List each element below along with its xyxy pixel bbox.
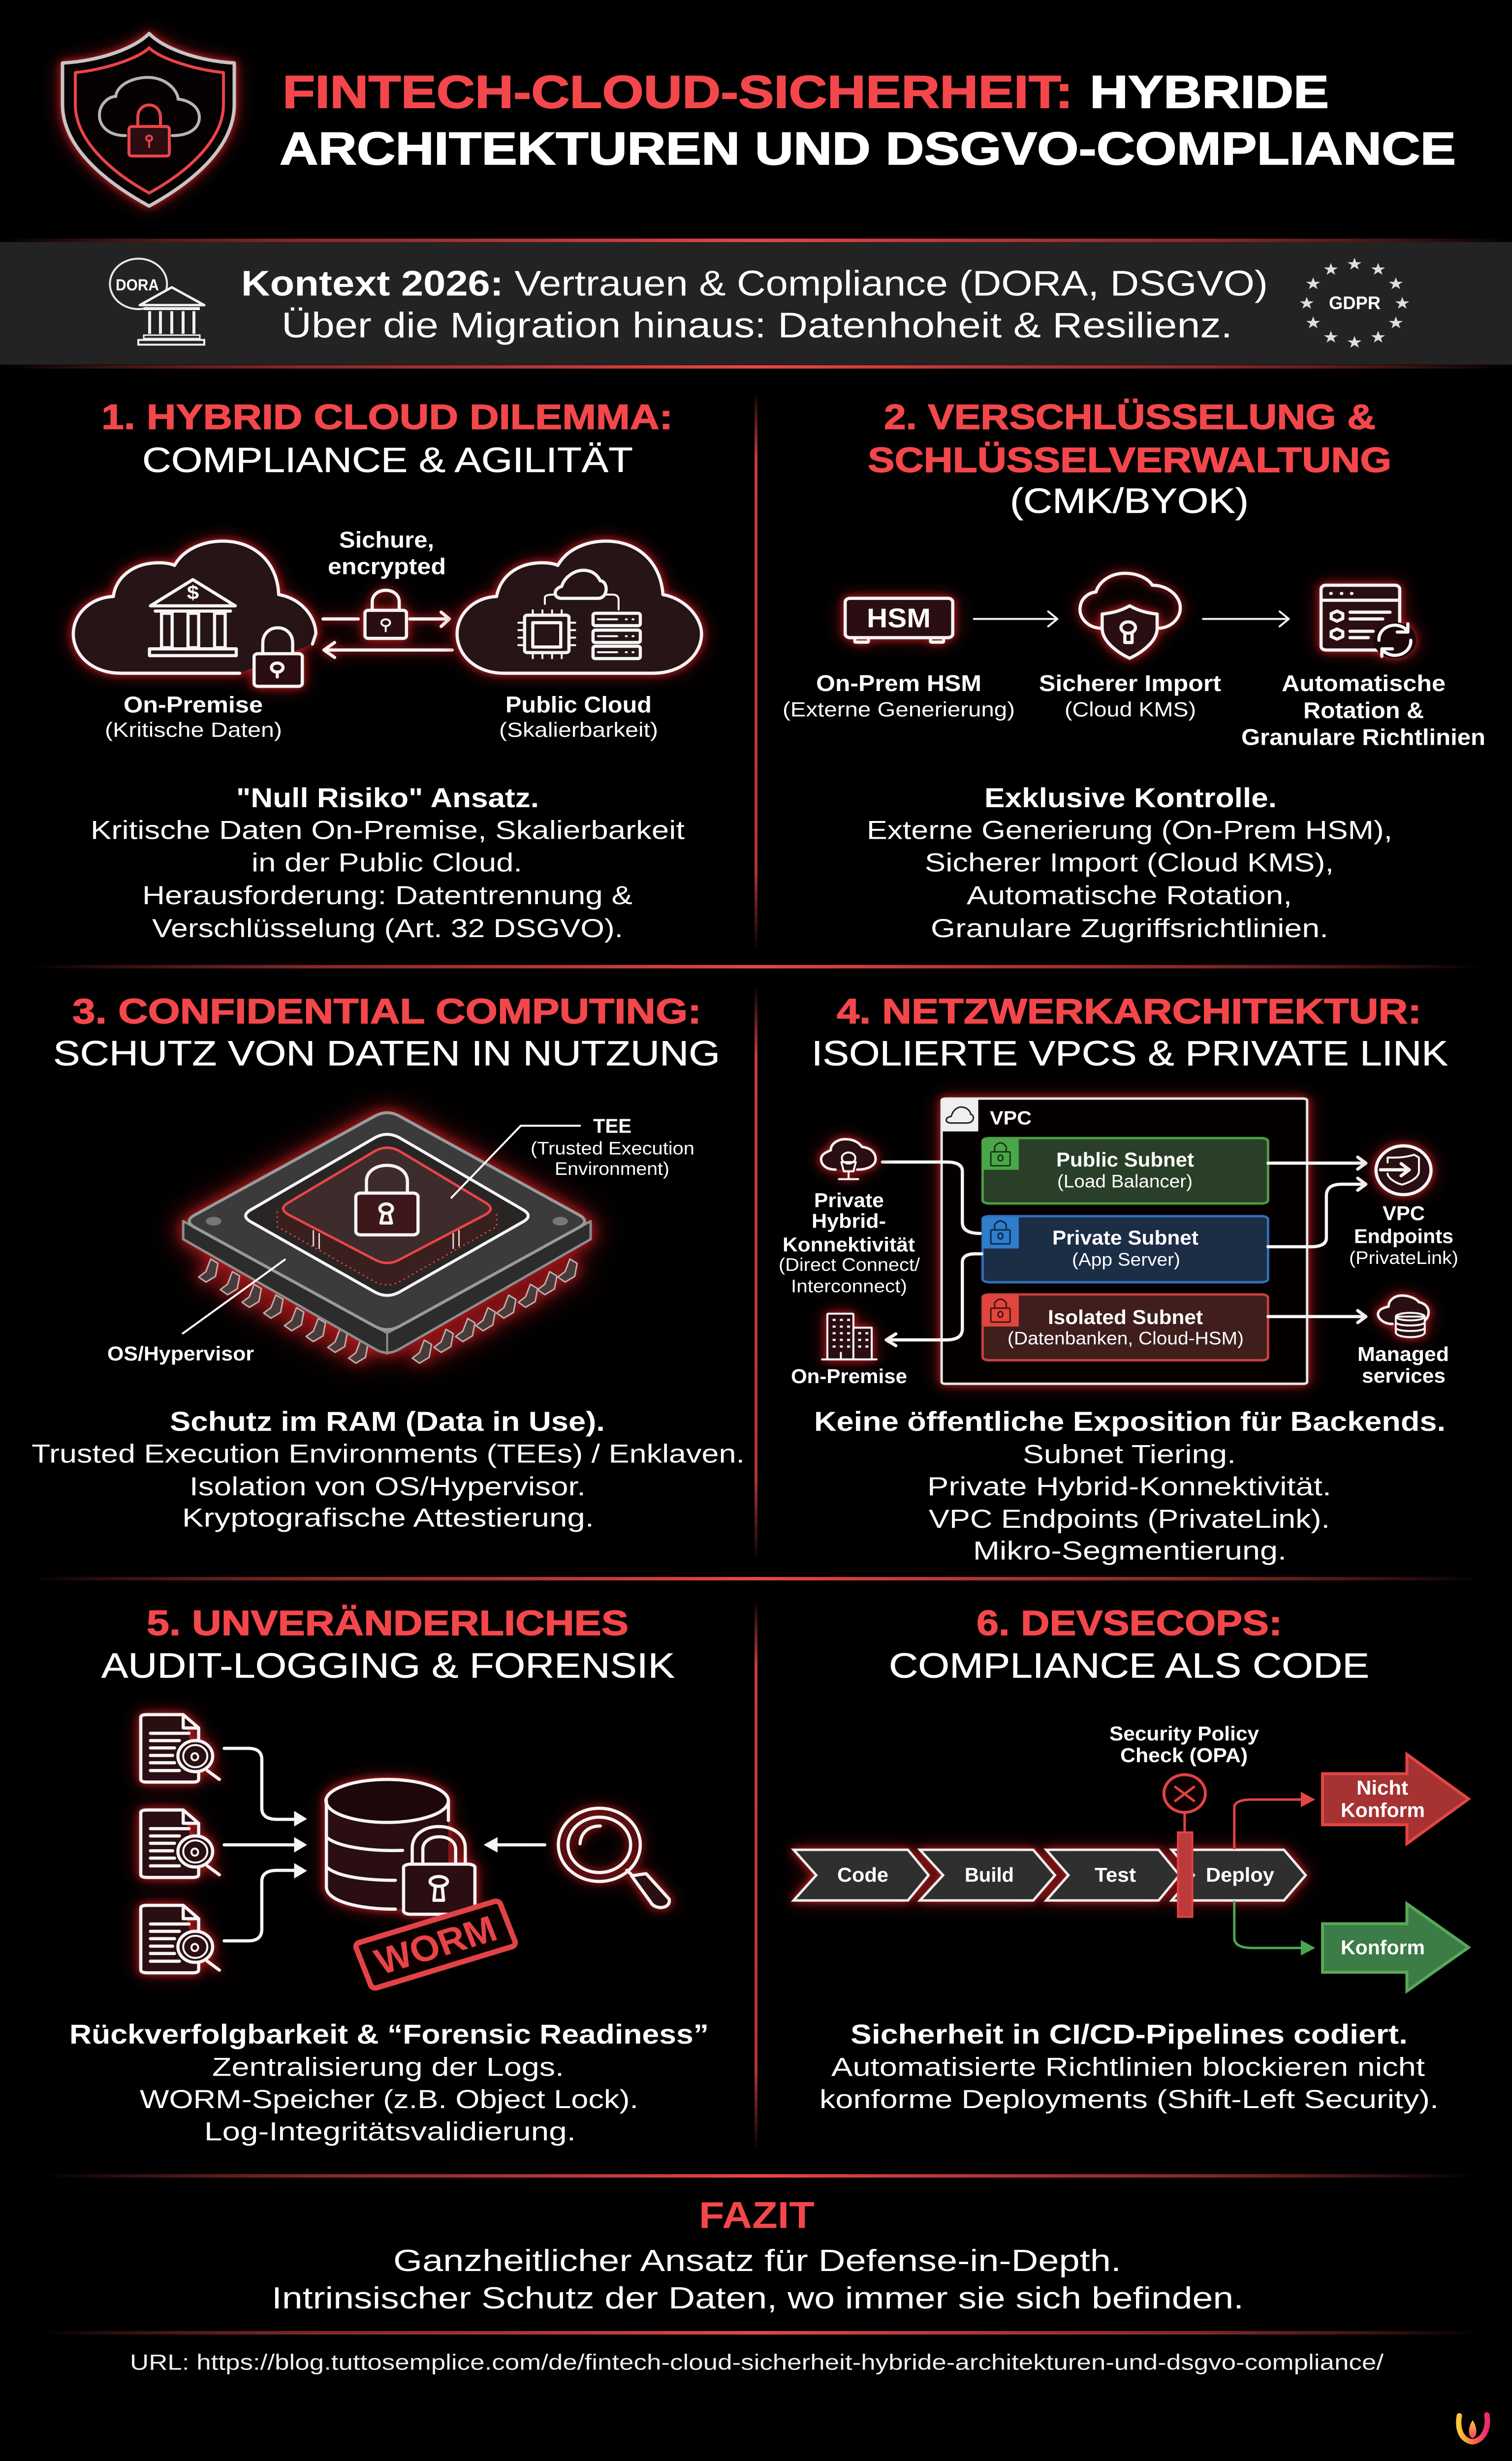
label: on-premise: On-Premise: [791, 1365, 907, 1388]
isolated subnet: Isolated Subnet: [1048, 1306, 1203, 1328]
heading 5: 5. UNVERÄNDERLICHES: [147, 1604, 629, 1643]
text block 4: [814, 1406, 1446, 1565]
icon: on-premise cloud with bank and lock: [73, 541, 316, 686]
icon: HSM box: HSM: [867, 603, 931, 633]
panel: 4 network architecture: [779, 992, 1458, 1565]
heading 1: COMPLIANCE & AGILITÄT: [142, 441, 633, 480]
title: ARCHITEKTUREN UND DSGVO-COMPLIANCE: [280, 123, 1456, 174]
label: rotation and policies: Automatische: [1282, 670, 1446, 696]
label: private hybrid connectivity: Private: [814, 1190, 884, 1212]
text block 3: [32, 1406, 745, 1532]
text block 1: "Null Risiko" Ansatz.: [236, 782, 539, 813]
pipeline labels: Test: [1095, 1864, 1136, 1886]
banner text: Über die Migration hinaus: Datenhoheit & Resilienz.: [282, 306, 1232, 345]
branch: not compliant: [1234, 1754, 1469, 1849]
label: VPC: VPC: [990, 1107, 1032, 1129]
icons: log documents: [141, 1715, 220, 1973]
VPC frame: [942, 1099, 1307, 1384]
heading 3: [53, 992, 720, 1073]
diagram: chip with TEE: [107, 1113, 694, 1365]
icon: private hybrid cloud: [821, 1139, 876, 1179]
text block 5: WORM-Speicher (z.B. Object Lock).: [140, 2084, 638, 2114]
icon: brand logo: [1459, 2415, 1487, 2442]
label: VPC endpoints: (PrivateLink): [1349, 1248, 1458, 1268]
label: VPC endpoints: VPC: [1383, 1202, 1425, 1225]
text block 1: [91, 782, 685, 943]
heading 6: [889, 1604, 1369, 1686]
text block 5: Zentralisierung der Logs.: [212, 2052, 564, 2082]
text block 6: Sicherheit in CI/CD-Pipelines codiert.: [850, 2019, 1408, 2050]
heading 5: [101, 1604, 675, 1686]
text block 4: VPC Endpoints (PrivateLink).: [929, 1504, 1330, 1533]
header: logo shield and title: [63, 33, 1456, 206]
text block 5: Rückverfolgbarkeit & “Forensic Readiness”: [69, 2019, 709, 2050]
label: rotation and policies: Rotation &: [1303, 697, 1424, 723]
diagram: on-premise and public cloud: [73, 527, 701, 741]
pipeline steps: [793, 1850, 1306, 1900]
heading 1: [101, 398, 673, 480]
text block 4: Keine öffentliche Exposition für Backends.: [814, 1406, 1446, 1437]
panel: 5 immutable audit logging: [69, 1604, 709, 2146]
text block 2: [867, 782, 1392, 943]
label: secure import: Sicherer Import: [1039, 670, 1221, 696]
heading 4: 4. NETZWERKARCHITEKTUR:: [837, 992, 1421, 1031]
isolated subnet: (Datenbanken, Cloud-HSM): [1008, 1328, 1244, 1349]
title: FINTECH-CLOUD-SICHERHEIT:: [283, 66, 1073, 118]
label: managed services: [1357, 1343, 1449, 1387]
label: secure encrypted: [328, 527, 446, 579]
pipeline labels: Deploy: [1206, 1864, 1274, 1886]
text block 3: Schutz im RAM (Data in Use).: [170, 1406, 605, 1437]
heading 4: [812, 992, 1448, 1073]
pipeline labels: Code: [837, 1864, 888, 1886]
panel: 6 devsecops: [793, 1604, 1469, 2114]
label: private hybrid connectivity: Interconnect): [791, 1276, 907, 1296]
text block 2: Sicherer Import (Cloud KMS),: [925, 848, 1334, 877]
icon: DORA bank: DORA: [116, 276, 159, 294]
text block 6: konforme Deployments (Shift-Left Security).: [819, 2084, 1439, 2114]
text block 3: Isolation von OS/Hypervisor.: [189, 1472, 586, 1501]
public subnet: (Load Balancer): [1057, 1171, 1193, 1192]
heading 2: 2. VERSCHLÜSSELUNG &: [884, 398, 1376, 437]
title: HYBRIDE: [1090, 66, 1329, 118]
conclusion: Intrinsischer Schutz der Daten, wo immer sie sich befinden.: [272, 2281, 1244, 2315]
text block 1: Herausforderung: Datentrennung &: [142, 881, 632, 910]
diagram: WORM storage: [141, 1715, 669, 1989]
text block 2: Granulare Zugriffsrichtlinien.: [931, 914, 1328, 943]
heading 4: ISOLIERTE VPCS & PRIVATE LINK: [812, 1034, 1448, 1073]
heading 6: COMPLIANCE ALS CODE: [889, 1646, 1369, 1686]
icon: chip: [183, 1113, 591, 1363]
text block 6: [819, 2019, 1439, 2114]
label: on-prem hsm: On-Prem HSM: [816, 670, 981, 696]
label: OS/Hypervisor: [107, 1259, 285, 1365]
branch: not compliant: Konform: [1341, 1799, 1425, 1822]
label: secure import: (Cloud KMS): [1065, 698, 1196, 721]
icon: on-premise building: [822, 1314, 877, 1359]
diagram: VPC architecture: [779, 1099, 1458, 1388]
text block 4: Subnet Tiering.: [1023, 1440, 1236, 1469]
heading 2: (CMK/BYOK): [1010, 481, 1249, 521]
isolated subnet: [982, 1294, 1268, 1360]
branch: not compliant: Nicht: [1356, 1777, 1408, 1799]
text block 1: in der Public Cloud.: [252, 848, 522, 877]
label: rotation and policies: Granulare Richtlinien: [1241, 724, 1485, 750]
label: TEE: Environment): [555, 1159, 669, 1179]
arrows into storage: [224, 1748, 545, 1941]
label: private hybrid connectivity: (Direct Connect/: [779, 1255, 920, 1275]
panel: 3 confidential computing: [32, 992, 745, 1532]
icon: public cloud with chip and servers: [457, 541, 701, 673]
text block 5: Log-Integritätsvalidierung.: [204, 2117, 576, 2146]
icon: policy window with rotation: [1321, 585, 1416, 658]
icon: DORA bank: [110, 259, 204, 345]
text block 1: Kritische Daten On-Premise, Skalierbarkeit: [91, 816, 685, 845]
label: TEE: [451, 1115, 694, 1199]
label: on-premise: On-Premise: [124, 692, 263, 718]
panel: 1 hybrid cloud dilemma: [73, 398, 701, 943]
text block 2: Externe Generierung (On-Prem HSM),: [867, 816, 1392, 845]
label: managed services: services: [1362, 1365, 1446, 1387]
text block 4: Mikro-Segmentierung.: [973, 1536, 1287, 1565]
policy gate with x: [1164, 1775, 1205, 1917]
icon: GDPR stars: GDPR: [1329, 293, 1381, 313]
label: on-premise: (Kritische Daten): [105, 719, 282, 741]
label: security policy check: Security Policy: [1109, 1723, 1259, 1745]
icon: database with lock: [326, 1779, 475, 1914]
label: private hybrid connectivity: Hybrid-: [812, 1210, 886, 1232]
stamp: WORM: WORM: [369, 1908, 503, 1983]
label: managed services: Managed: [1357, 1343, 1449, 1365]
heading 1: 1. HYBRID CLOUD DILEMMA:: [101, 398, 673, 437]
label: TEE: TEE: [593, 1115, 631, 1137]
text block 3: Kryptografische Attestierung.: [182, 1503, 594, 1532]
label: secure encrypted: Sichure,: [339, 527, 434, 553]
private subnet: [982, 1216, 1268, 1282]
text block 3: Trusted Execution Environments (TEEs) / Enklaven.: [32, 1439, 745, 1468]
label: on-premise: [105, 692, 282, 741]
label: VPC endpoints: Endpoints: [1354, 1226, 1453, 1248]
text block 1: Verschlüsselung (Art. 32 DSGVO).: [152, 914, 623, 943]
icon: HSM box: [845, 599, 953, 642]
icon: managed services: [1378, 1295, 1429, 1337]
heading 2: [868, 398, 1391, 521]
heading 2: SCHLÜSSELVERWALTUNG: [868, 441, 1391, 480]
pipeline labels: [837, 1864, 1274, 1886]
label: security policy check: [1109, 1723, 1259, 1767]
title: [280, 66, 1456, 174]
label: TEE: (Trusted Execution: [531, 1138, 694, 1159]
label: security policy check: Check (OPA): [1120, 1744, 1248, 1767]
branch: compliant: [1234, 1901, 1469, 1991]
label: on-prem hsm: [783, 670, 1015, 721]
heading 6: 6. DEVSECOPS:: [976, 1604, 1282, 1643]
label: on-prem hsm: (Externe Generierung): [783, 698, 1015, 721]
text block 4: Private Hybrid-Konnektivität.: [927, 1472, 1331, 1501]
label: public cloud: [499, 692, 658, 741]
text block 2: Automatische Rotation,: [967, 881, 1292, 910]
icon: VPC endpoint: [1376, 1146, 1431, 1195]
label: secure encrypted: encrypted: [328, 553, 446, 579]
icon: GDPR stars: [1300, 258, 1409, 348]
icon: on-premise cloud with bank and lock: $: [187, 581, 199, 603]
diagram: key flow: [783, 573, 1485, 750]
panel: 2 encryption and key management: [783, 398, 1485, 943]
label: VPC endpoints: [1349, 1202, 1458, 1268]
icon: shield with cloud lock: [63, 33, 234, 206]
dividers: [30, 391, 1481, 2335]
private subnet: Private Subnet: [1052, 1227, 1198, 1249]
conclusion: [272, 2195, 1244, 2315]
icon: lock with two-way arrows: [323, 590, 452, 658]
heading 3: 3. CONFIDENTIAL COMPUTING:: [72, 992, 701, 1031]
conclusion: Ganzheitlicher Ansatz für Defense-in-Depth.: [393, 2243, 1121, 2277]
public subnet: Public Subnet: [1056, 1149, 1194, 1171]
heading 3: SCHUTZ VON DATEN IN NUTZUNG: [53, 1034, 720, 1073]
heading 5: AUDIT-LOGGING & FORENSIK: [101, 1646, 675, 1686]
private subnet: (App Server): [1072, 1250, 1180, 1270]
branch: compliant: Konform: [1341, 1937, 1425, 1959]
pipeline labels: Build: [965, 1864, 1014, 1886]
arrows: [974, 611, 1289, 627]
label: private hybrid connectivity: Konnektivität: [783, 1234, 915, 1256]
text block 2: Exklusive Kontrolle.: [984, 782, 1277, 813]
label: OS/Hypervisor: OS/Hypervisor: [107, 1343, 254, 1365]
banner text: Kontext 2026: Vertrauen & Compliance (DORA, DSGVO): [241, 264, 1268, 303]
label: private hybrid connectivity: [779, 1190, 920, 1296]
banner text: [241, 264, 1268, 345]
text block 5: [69, 2019, 709, 2146]
label: rotation and policies: [1241, 670, 1485, 750]
icon: magnifier: [558, 1808, 669, 1908]
source URL: URL: https://blog.tuttosemplice.com/de/fintech-cloud-sicherheit-hybride-architekturen-und-dsgvo-compliance/: [130, 2350, 1384, 2374]
label: public cloud: (Skalierbarkeit): [499, 719, 658, 741]
connector arrows: [882, 1157, 1366, 1346]
label: public cloud: Public Cloud: [505, 692, 652, 718]
diagram: CI/CD pipeline: [793, 1723, 1469, 1991]
label: secure import: [1039, 670, 1221, 721]
public subnet: [982, 1138, 1268, 1203]
conclusion: FAZIT: [699, 2195, 815, 2237]
text block 6: Automatisierte Richtlinien blockieren nicht: [831, 2052, 1425, 2082]
context banner: [0, 239, 1512, 369]
icon: cloud shield: [1080, 573, 1180, 658]
